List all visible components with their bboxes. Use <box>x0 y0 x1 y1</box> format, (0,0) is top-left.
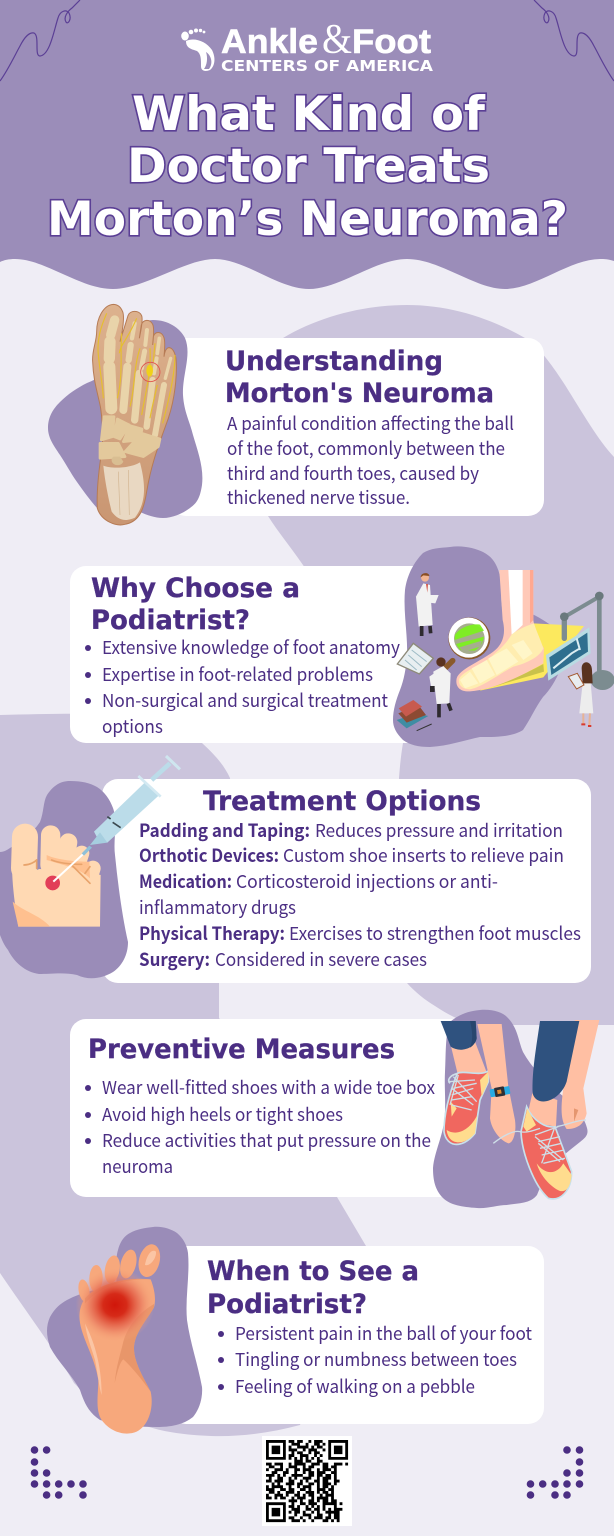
body text: of the foot, commonly between the <box>227 435 505 461</box>
icon: foot logo <box>181 28 214 71</box>
treatment list: Physical Therapy: <box>139 920 285 946</box>
icon: foot with injection <box>12 756 180 927</box>
card background <box>170 338 544 516</box>
title: Doctor Treats <box>127 139 490 194</box>
header banner <box>0 0 614 289</box>
section heading <box>225 346 494 409</box>
bullet list: Tingling or numbness between toes <box>235 1346 517 1372</box>
logo tagline: CENTERS OF AMERICA <box>221 57 433 75</box>
bullet list <box>85 634 401 739</box>
body text: thickened nerve tissue. <box>227 484 410 510</box>
right pant leg <box>533 1021 579 1101</box>
right shin <box>526 1092 557 1127</box>
title: What Kind of <box>132 87 486 142</box>
section heading: Podiatrist? <box>91 605 250 636</box>
leg and foot <box>456 570 544 691</box>
calendar <box>397 643 433 674</box>
bullet list: Expertise in foot-related problems <box>102 661 373 687</box>
bullet list: Extensive knowledge of foot anatomy <box>102 634 401 660</box>
section heading: Morton's Neuroma <box>225 378 494 409</box>
dots pattern left <box>31 1446 87 1499</box>
books <box>397 700 432 731</box>
doctor magnifier <box>429 657 451 717</box>
logo <box>181 17 433 75</box>
treatment list <box>139 817 581 972</box>
left pant leg <box>441 1021 477 1050</box>
panel: treatment options <box>0 756 591 983</box>
bullet list: Feeling of walking on a pebble <box>235 1373 475 1399</box>
panel: when to see a podiatrist <box>47 1227 544 1434</box>
logo: Foot <box>352 23 431 61</box>
card background <box>70 566 430 743</box>
bullet list: Avoid high heels or tight shoes <box>102 1101 343 1127</box>
card background <box>70 1019 470 1197</box>
title: Morton’s Neuroma? <box>47 192 568 247</box>
treatment list: Custom shoe inserts to relieve pain <box>283 842 564 868</box>
icon: foot skeleton <box>93 304 176 525</box>
panel: preventive measures <box>70 1010 599 1208</box>
treatment list: Reduces pressure and irritation <box>315 817 563 843</box>
section heading <box>91 573 300 636</box>
bullet list <box>85 1074 435 1179</box>
bullet list: Non-surgical and surgical treatment <box>102 687 388 713</box>
body text: A painful condition affecting the ball <box>227 410 514 436</box>
yellow floor <box>480 623 584 691</box>
bullet list: neuroma <box>102 1153 173 1179</box>
bullet list: Persistent pain in the ball of your foot <box>235 1320 532 1346</box>
left arm <box>477 1024 515 1143</box>
blob behind foot <box>47 1227 202 1427</box>
panel: why choose a podiatrist <box>70 546 614 747</box>
x-ray stand <box>564 597 599 677</box>
treatment list: Exercises to strengthen foot muscles <box>289 920 581 946</box>
decorative squiggle left <box>0 0 80 81</box>
card background <box>102 779 591 983</box>
logo wordmark: Ankle <box>221 23 318 61</box>
watch <box>489 1085 511 1098</box>
treatment list: Corticosteroid injections or anti- <box>236 868 498 894</box>
body text <box>227 410 514 510</box>
section heading: Preventive Measures <box>88 1034 395 1065</box>
section heading: Podiatrist? <box>207 1289 367 1320</box>
icon: foot sole with pain <box>76 1242 163 1434</box>
bullet list: options <box>102 713 163 739</box>
x-ray monitor <box>546 627 591 681</box>
bullet list: Wear well-fitted shoes with a wide toe box <box>102 1074 435 1100</box>
logo: & <box>322 17 352 63</box>
section heading: Why Choose a <box>91 573 300 604</box>
doctor top <box>416 573 439 636</box>
illustration: doctors examining foot <box>397 570 614 731</box>
panel: understanding <box>48 304 544 525</box>
treatment list: Padding and Taping: <box>139 817 310 843</box>
section heading <box>207 1256 419 1320</box>
QR code <box>262 1436 352 1526</box>
decorative squiggle right <box>534 0 614 81</box>
section heading: Treatment Options <box>203 786 481 817</box>
illustration: tying shoes <box>441 1020 599 1199</box>
treatment list: Orthotic Devices: <box>139 842 279 868</box>
treatment list: Considered in severe cases <box>215 946 427 972</box>
treatment list: Surgery: <box>139 946 210 972</box>
section heading: When to See a <box>207 1256 419 1287</box>
left shoe <box>444 1071 488 1144</box>
title <box>47 87 568 247</box>
doctor right <box>568 662 593 726</box>
blob behind hand <box>0 781 128 978</box>
blob behind illustration <box>393 546 564 747</box>
card background <box>170 1246 544 1424</box>
bullet list <box>218 1320 532 1399</box>
treatment list: Medication: <box>139 868 232 894</box>
blob behind shoes <box>433 1010 588 1208</box>
section heading: Understanding <box>225 346 443 377</box>
magnifying glass <box>443 661 453 671</box>
treatment list: inflammatory drugs <box>139 894 296 920</box>
bullet list: Reduce activities that put pressure on the <box>102 1127 431 1153</box>
dots pattern right <box>527 1446 583 1499</box>
body text: third and fourth toes, caused by <box>227 460 480 486</box>
blob behind foot skeleton <box>48 320 202 518</box>
left shin <box>451 1042 488 1077</box>
right arm <box>562 1020 599 1129</box>
right shoe <box>493 1107 586 1199</box>
